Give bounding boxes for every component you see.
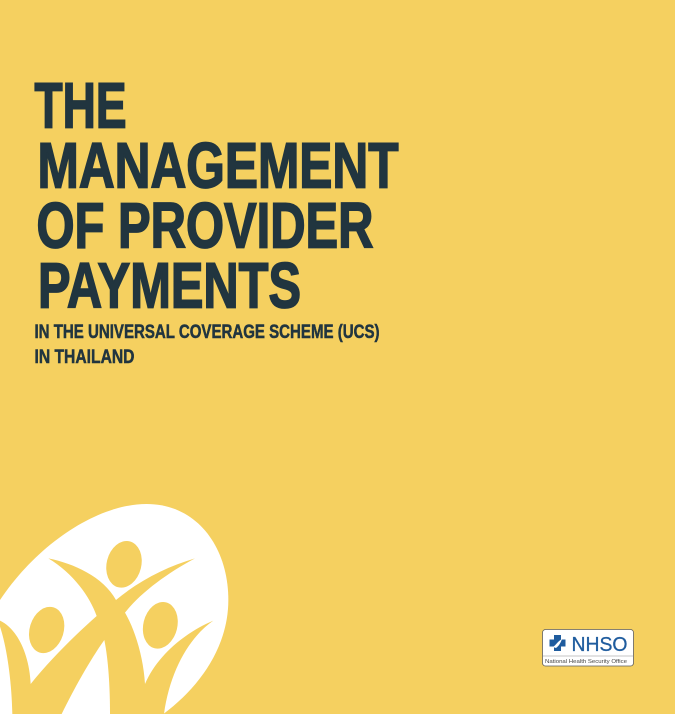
subtitle: [34, 322, 380, 368]
title: MANAGEMENT: [38, 130, 398, 202]
title: [34, 70, 398, 322]
subtitle: IN THAILAND: [34, 347, 134, 368]
logo: NHSO: National Health Security Office: [545, 659, 627, 665]
title: PAYMENTS: [38, 250, 301, 322]
logo: NHSO: NHSO: [572, 633, 628, 656]
logo: NHSO: [542, 630, 634, 666]
icon: people emblem: [0, 504, 228, 714]
title: OF PROVIDER: [36, 190, 374, 262]
subtitle: IN THE UNIVERSAL COVERAGE SCHEME (UCS): [34, 322, 380, 343]
title: THE: [34, 70, 126, 142]
